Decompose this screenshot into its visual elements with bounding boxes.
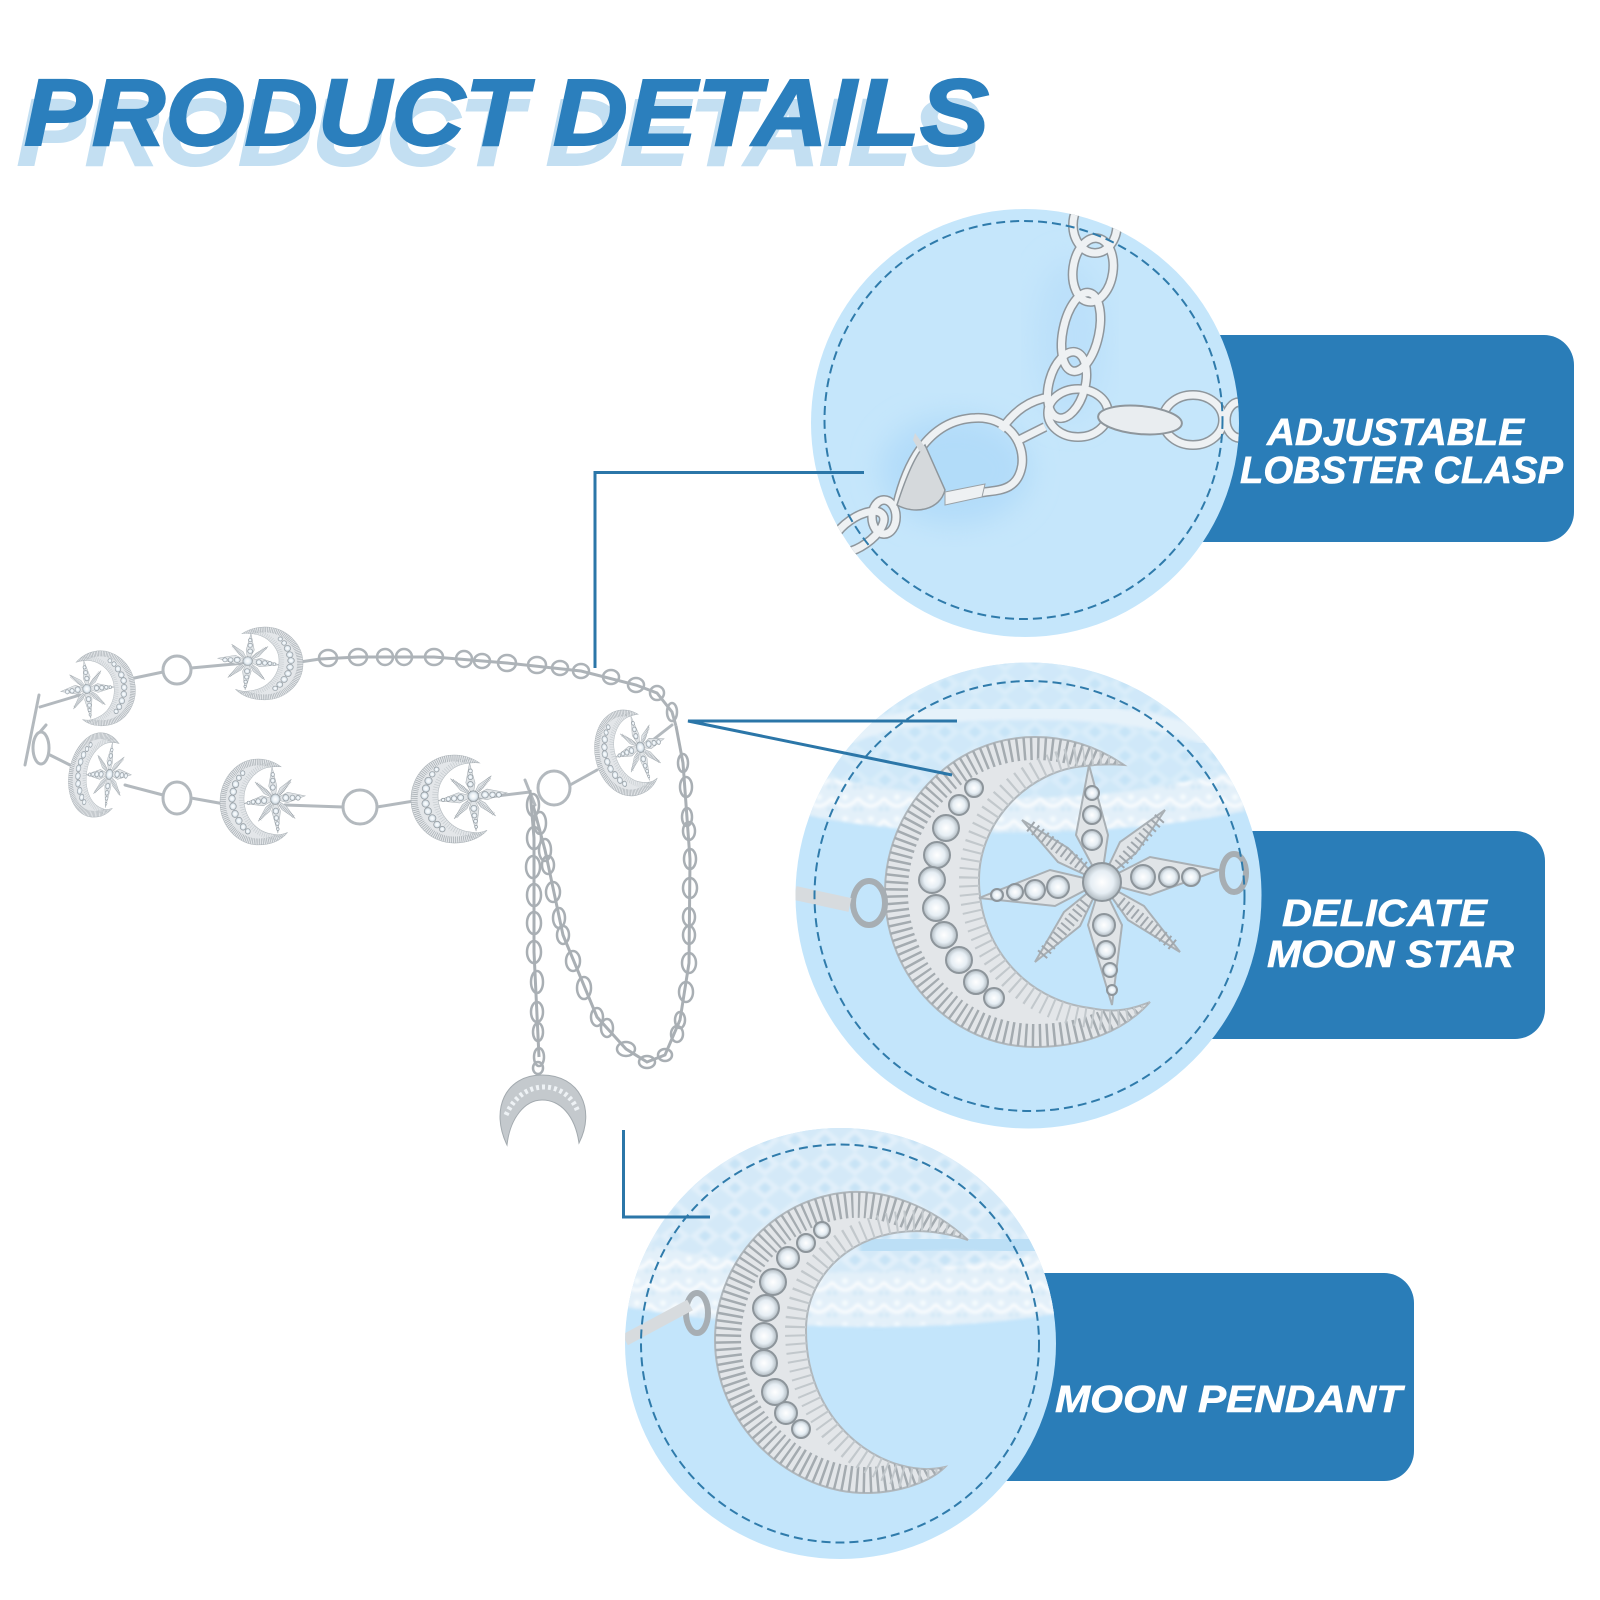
dashed ring <box>641 1144 1039 1542</box>
leader line: clasp <box>595 472 864 668</box>
leader line: moon pendant <box>624 1130 710 1217</box>
connector rings and bars <box>25 656 672 824</box>
title: DETAILS <box>553 60 989 166</box>
title: PRODUCT <box>17 80 529 186</box>
top chain <box>319 649 677 726</box>
panel: adjustable lobster clasp <box>811 197 1574 637</box>
label text: LOBSTER CLASP <box>1240 450 1564 492</box>
title: DETAILS <box>546 80 980 186</box>
detail circle <box>796 662 1262 1128</box>
hanging moon pendant <box>500 1062 586 1145</box>
leader lines: moon star <box>688 721 957 775</box>
title <box>17 60 989 186</box>
label text: MOON PENDANT <box>1055 1379 1405 1421</box>
detail circle <box>811 209 1239 637</box>
title: PRODUCT <box>24 60 534 166</box>
glass plate background and moon star photo <box>790 660 1265 1047</box>
label text: DELICATE <box>1282 893 1489 935</box>
label bar <box>1100 335 1574 542</box>
label text: ADJUSTABLE <box>1266 412 1526 454</box>
clasp and chain photo <box>837 214 1239 554</box>
label text <box>1267 893 1515 976</box>
label text <box>1240 412 1564 492</box>
product photo: moon star waist chain <box>25 627 697 1145</box>
moon star charms <box>54 627 674 845</box>
label bar <box>1100 831 1545 1039</box>
panel: delicate moon star <box>790 660 1545 1128</box>
detail circle <box>625 1128 1056 1559</box>
label text: MOON STAR <box>1267 934 1515 976</box>
label bar <box>950 1273 1414 1481</box>
panel: moon pendant <box>620 1125 1414 1559</box>
dashed ring <box>824 221 1222 619</box>
glass plate background and moon photo <box>620 1125 1060 1493</box>
dangling chains <box>526 726 697 1068</box>
dashed ring <box>814 681 1244 1111</box>
